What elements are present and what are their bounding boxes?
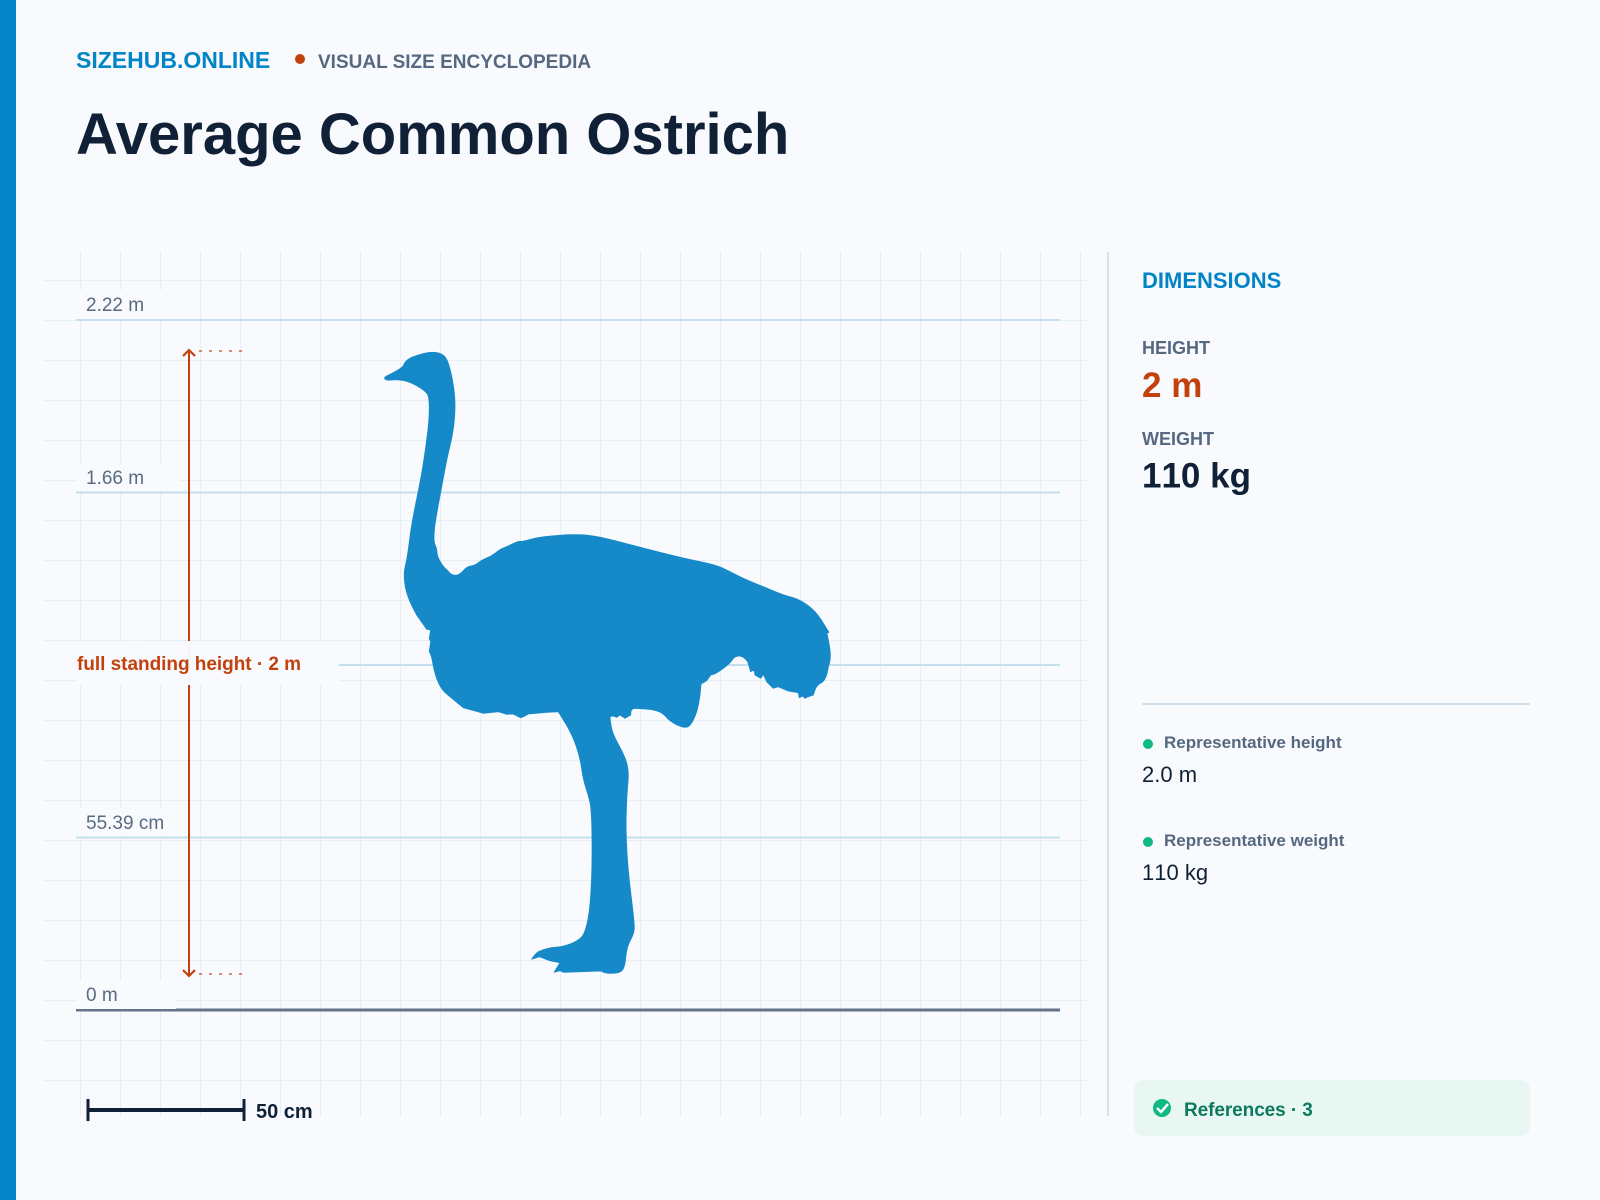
references badge xyxy=(1134,1080,1530,1136)
title: Average Common Ostrich xyxy=(76,102,789,167)
callout: full standing height: full standing height · 2 m xyxy=(77,654,301,675)
representative height xyxy=(1142,733,1342,787)
panel: dimensions xyxy=(1108,252,1530,1116)
brand name: SIZEHUB.ONLINE xyxy=(76,47,270,73)
height metric: 2 m xyxy=(1142,366,1202,405)
label 1.66 m: 1.66 m xyxy=(86,468,144,489)
left accent bar xyxy=(0,0,16,1200)
callout: full standing height: 1.11 m xyxy=(86,639,144,660)
ostrich silhouette xyxy=(385,352,830,973)
scale bar xyxy=(88,1099,313,1123)
representative height: 2.0 m xyxy=(1142,762,1197,787)
representative weight xyxy=(1142,831,1345,885)
callout: full standing height xyxy=(76,639,339,685)
weight metric: WEIGHT xyxy=(1142,429,1214,449)
references badge: References · 3 xyxy=(1184,1100,1313,1121)
scale bar: 50 cm xyxy=(256,1101,313,1123)
weight metric xyxy=(1142,429,1251,496)
panel heading: DIMENSIONS xyxy=(1142,268,1281,293)
height metric: HEIGHT xyxy=(1142,338,1210,358)
tagline: VISUAL SIZE ENCYCLOPEDIA xyxy=(318,52,591,73)
background grid xyxy=(44,252,1088,1116)
height dimension arrow xyxy=(183,350,242,976)
label 2.22 m: 2.22 m xyxy=(86,295,144,316)
icon: check xyxy=(1153,1099,1171,1117)
representative height: Representative height xyxy=(1164,733,1342,752)
representative weight: Representative weight xyxy=(1164,831,1345,850)
representative weight: 110 kg xyxy=(1142,860,1208,885)
height ruler lines and labels xyxy=(76,290,1060,1010)
label 0 m: 0 m xyxy=(86,985,118,1006)
header xyxy=(76,47,789,167)
height metric xyxy=(1142,338,1210,405)
header dot xyxy=(295,54,305,64)
label 55.39 cm: 55.39 cm xyxy=(86,813,164,834)
weight metric: 110 kg xyxy=(1142,456,1251,496)
